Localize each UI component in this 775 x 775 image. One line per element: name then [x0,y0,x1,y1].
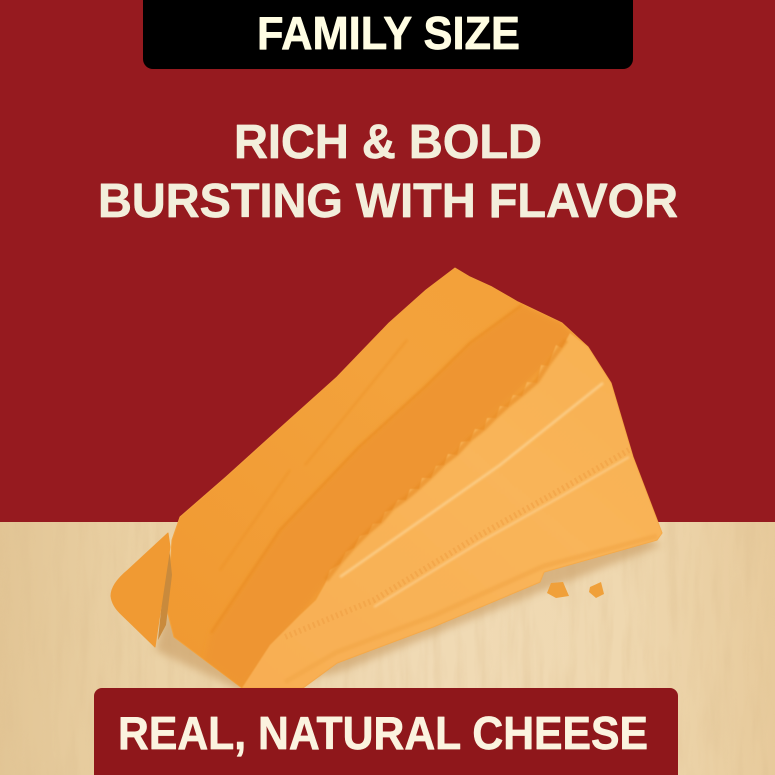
jagged torn edge detail [326,340,566,580]
wooden cutting board [0,522,775,775]
pale lower facet with jagged edge [242,333,662,688]
bottom edge highlight [285,536,657,682]
small broken wedge [111,533,170,647]
banner label: REAL, NATURAL CHEESE [118,707,648,759]
headline line 1: RICH & BOLD [234,116,542,169]
cheese body top face [167,268,662,688]
crumb right [589,582,604,598]
crack shadow between wedge and body [158,536,172,640]
cheese shadow [155,535,662,692]
ridge line on pale facet [340,383,603,577]
headline [98,116,678,228]
darker middle band [286,308,570,570]
crumb left [547,582,569,598]
banner label: FAMILY SIZE [257,7,520,59]
ridge lines on top face [211,305,522,633]
toothed ridge on pale facet [285,450,629,637]
top black banner [143,0,633,69]
cheese wedge [111,268,662,692]
bottom red banner [94,688,678,775]
headline line 2: BURSTING WITH FLAVOR [98,175,678,228]
